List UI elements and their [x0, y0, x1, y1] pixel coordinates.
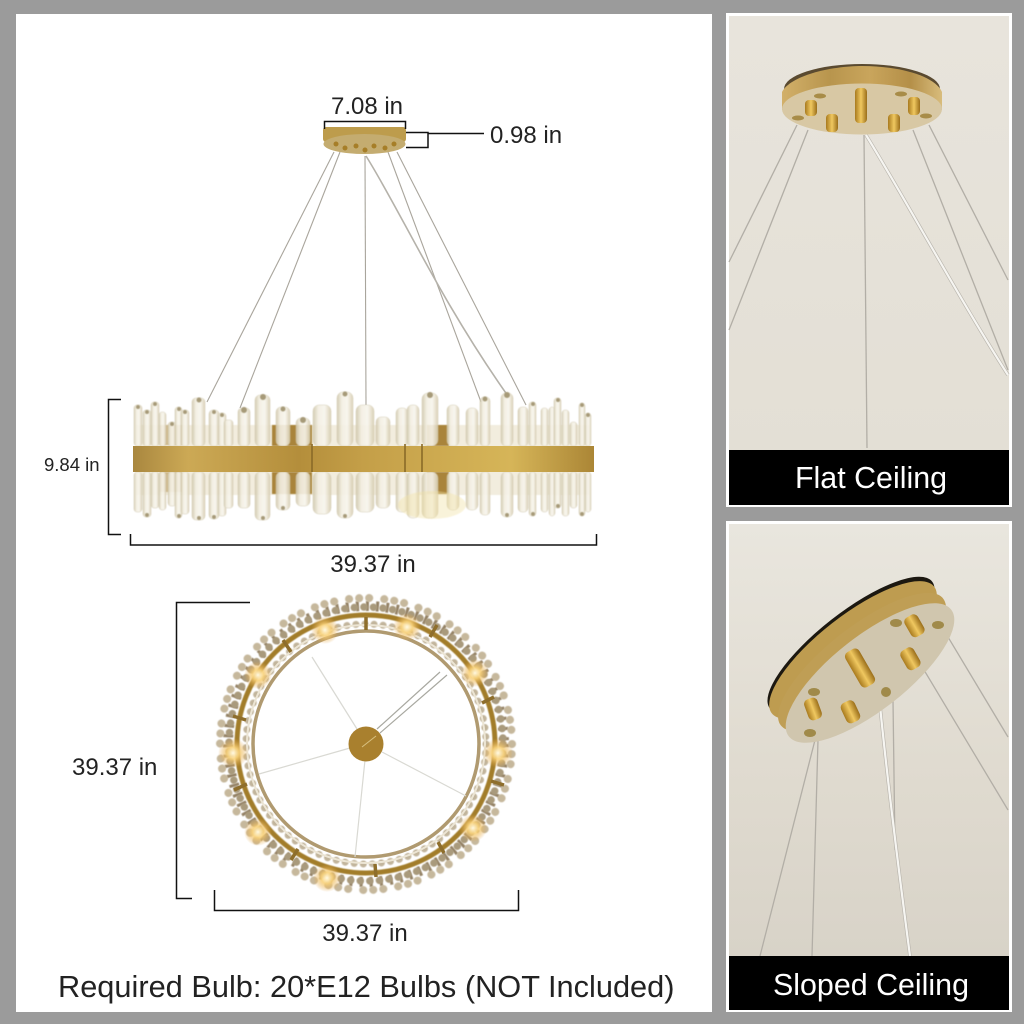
canopy: [782, 64, 942, 134]
dimension: canopy width: [324, 93, 406, 129]
icon: side view chandelier: [133, 127, 594, 520]
caption bar: sloped ceiling: [729, 956, 1009, 1010]
gold frame ring: [237, 615, 495, 873]
dimension: top view width: [214, 890, 518, 947]
bolts: [803, 612, 926, 725]
dimension: side width: [130, 534, 596, 578]
dimension: canopy height: 0.98 in: [490, 122, 562, 149]
lower crystals: [134, 472, 591, 520]
bulb glows: [218, 613, 513, 892]
dimension: side width: 39.37 in: [330, 551, 416, 578]
bolts: [805, 88, 920, 132]
icon: top view chandelier ring: [218, 598, 513, 892]
dark gaps between beads: [228, 606, 504, 882]
gold reflections behind crystals: [160, 425, 449, 494]
mounting screws: [792, 92, 932, 120]
dimension: canopy height: [406, 122, 562, 149]
upper crystals: [134, 392, 591, 446]
dimension: top view width: 39.37 in: [322, 920, 408, 947]
caption bar: sloped ceiling: Sloped Ceiling: [773, 968, 969, 1002]
wires: [729, 125, 1008, 448]
suspension wires: [207, 152, 526, 408]
dimension: top view height: 39.37 in: [72, 754, 157, 781]
panel: dimensions: [16, 14, 712, 1012]
wires: [760, 625, 1008, 956]
canopy: [323, 127, 406, 154]
outer crystal beads: [220, 598, 512, 890]
dimension: side height: 9.84 in: [44, 454, 100, 475]
caption bar: flat ceiling: Flat Ceiling: [795, 461, 947, 495]
crystal backing haze: [136, 425, 590, 495]
inner rim: [253, 631, 479, 857]
dimension: top view height: [72, 602, 250, 898]
radial frame braces: [233, 617, 504, 877]
warm glow at lower crystals: [398, 491, 466, 519]
note: required bulbs: Required Bulb: 20*E12 Bulbs (NOT Included): [58, 969, 674, 1004]
inner crystal beads: [246, 624, 486, 864]
dimension: side height: [44, 400, 121, 534]
panel: flat ceiling photo: [726, 13, 1012, 507]
canopy: [750, 556, 974, 766]
crystal tips: [136, 392, 590, 520]
metal band: [133, 444, 594, 472]
caption bar: flat ceiling: [729, 450, 1009, 505]
dimension: canopy width: 7.08 in: [331, 93, 403, 120]
spokes: [259, 657, 466, 857]
center canopy: [348, 726, 384, 762]
panel: sloped ceiling photo: [726, 521, 1012, 1012]
mounting screws: [804, 619, 944, 737]
